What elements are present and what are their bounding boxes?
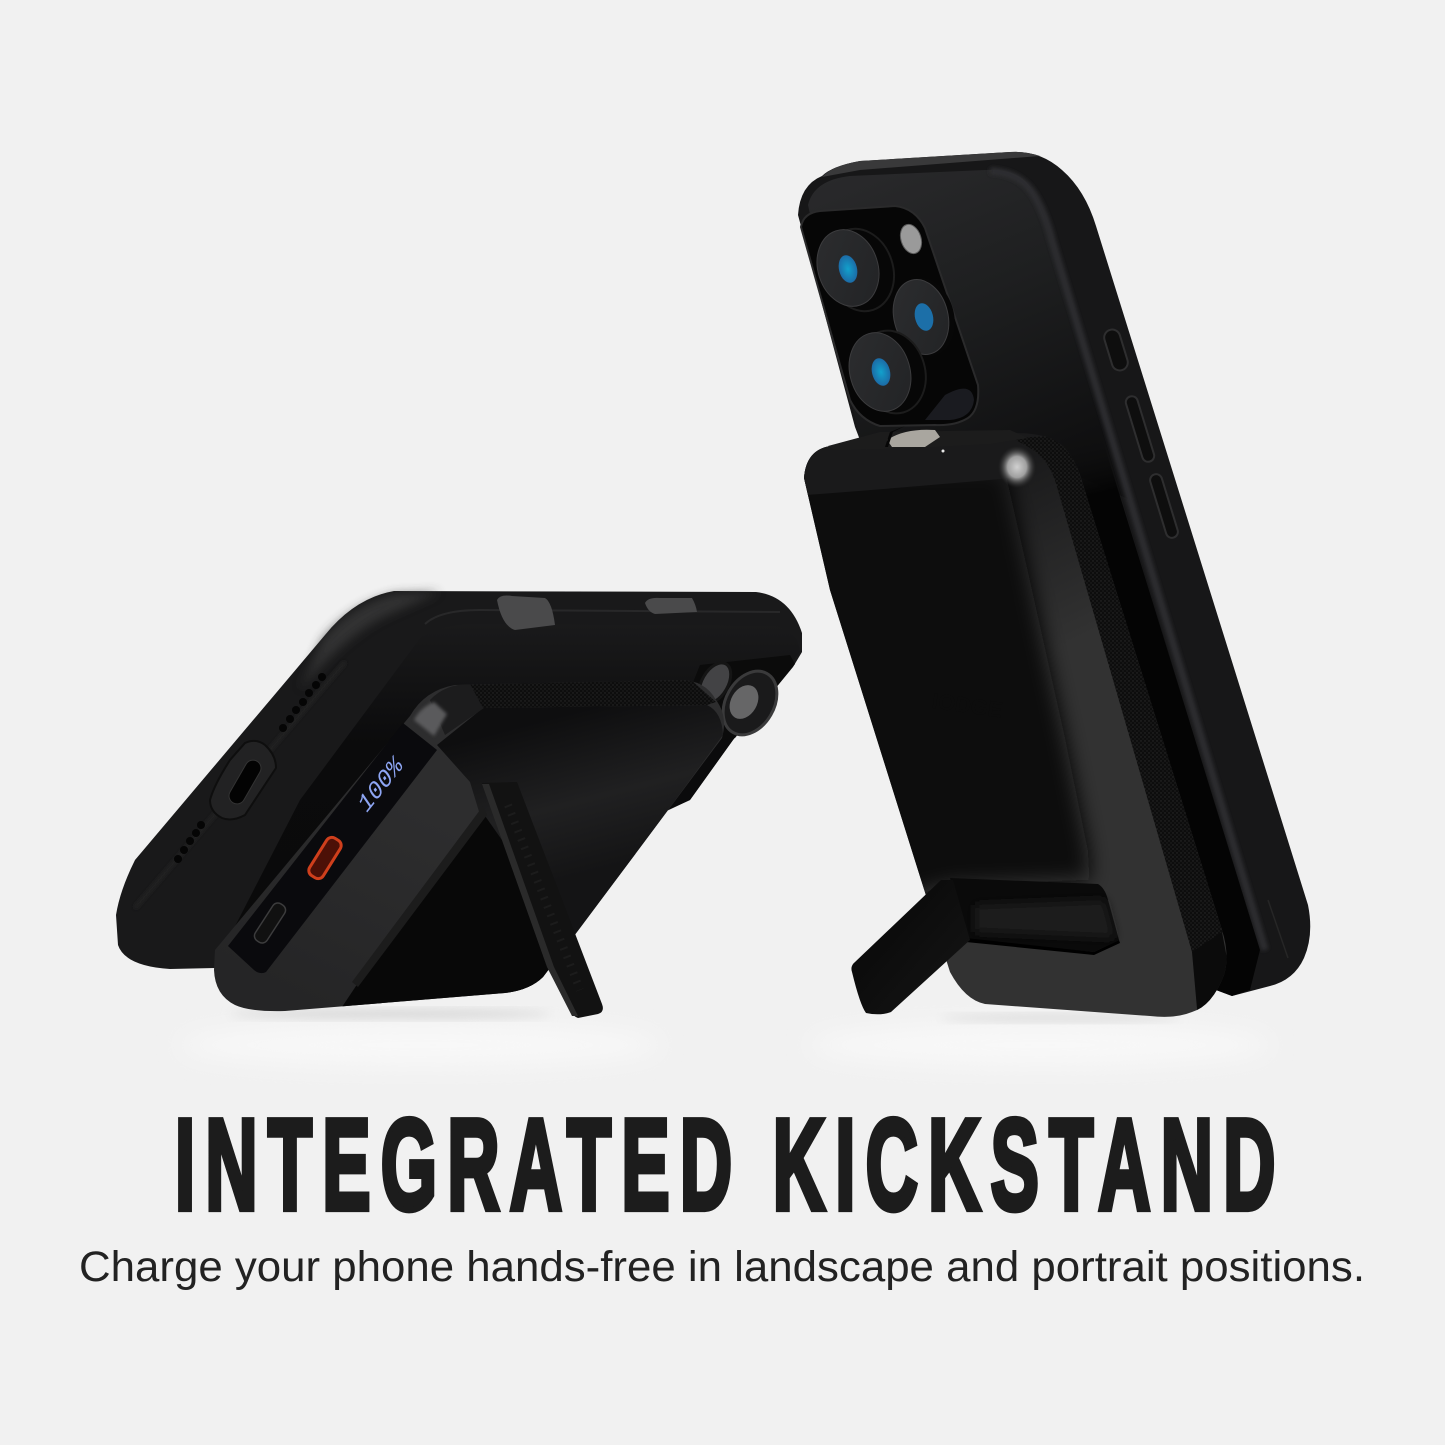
fabric band bbox=[470, 679, 716, 708]
battery readout: 100% bbox=[355, 752, 408, 821]
side buttons bbox=[497, 596, 555, 630]
subtitle: Charge your phone hands-free in landscape and portrait positions. bbox=[79, 1243, 1365, 1291]
display strip bbox=[228, 723, 437, 973]
icon: lens one bbox=[807, 220, 904, 320]
floor reflection glow bbox=[180, 1009, 1270, 1067]
rear face bbox=[437, 705, 723, 995]
black gap between bank and phone rim bbox=[1055, 425, 1260, 996]
product: phone and power bank in landscape bbox=[116, 591, 802, 1018]
lens peeking bbox=[690, 655, 795, 745]
phone back plate bbox=[215, 624, 800, 965]
phone body portrait bbox=[798, 152, 1310, 996]
recess bbox=[340, 813, 560, 1010]
product: phone and power bank in portrait bbox=[760, 152, 1310, 1020]
charging port bbox=[210, 741, 276, 819]
corner chip bbox=[414, 702, 447, 736]
kickstand portrait bbox=[851, 880, 970, 1014]
phone back face bbox=[808, 170, 1130, 500]
fabric band bbox=[1012, 436, 1226, 952]
kickstand recess bbox=[950, 878, 1120, 955]
kickstand landscape bbox=[482, 782, 603, 1018]
speaker dots lower bbox=[174, 821, 205, 863]
power bank top lip and connector bbox=[828, 426, 1028, 452]
title: INTEGRATED KICKSTAND bbox=[175, 1093, 1275, 1237]
icon: orange usb port bbox=[307, 835, 343, 881]
embossed logo: IODGE bbox=[930, 688, 1004, 723]
power bank landscape bbox=[214, 679, 724, 1011]
phone body landscape bbox=[116, 591, 802, 969]
icon: flash bbox=[897, 222, 925, 256]
corner cap bbox=[430, 684, 484, 735]
camera island bbox=[801, 206, 978, 426]
icon: usb-c port bbox=[252, 901, 288, 945]
side buttons bbox=[1102, 328, 1179, 539]
corner highlight bbox=[998, 446, 1036, 488]
power bank portrait bbox=[804, 427, 1226, 1017]
icon: lens three bbox=[840, 323, 935, 421]
dark front face bbox=[804, 464, 1098, 894]
icon: lens two bbox=[886, 271, 963, 363]
speaker dots upper bbox=[279, 673, 326, 732]
